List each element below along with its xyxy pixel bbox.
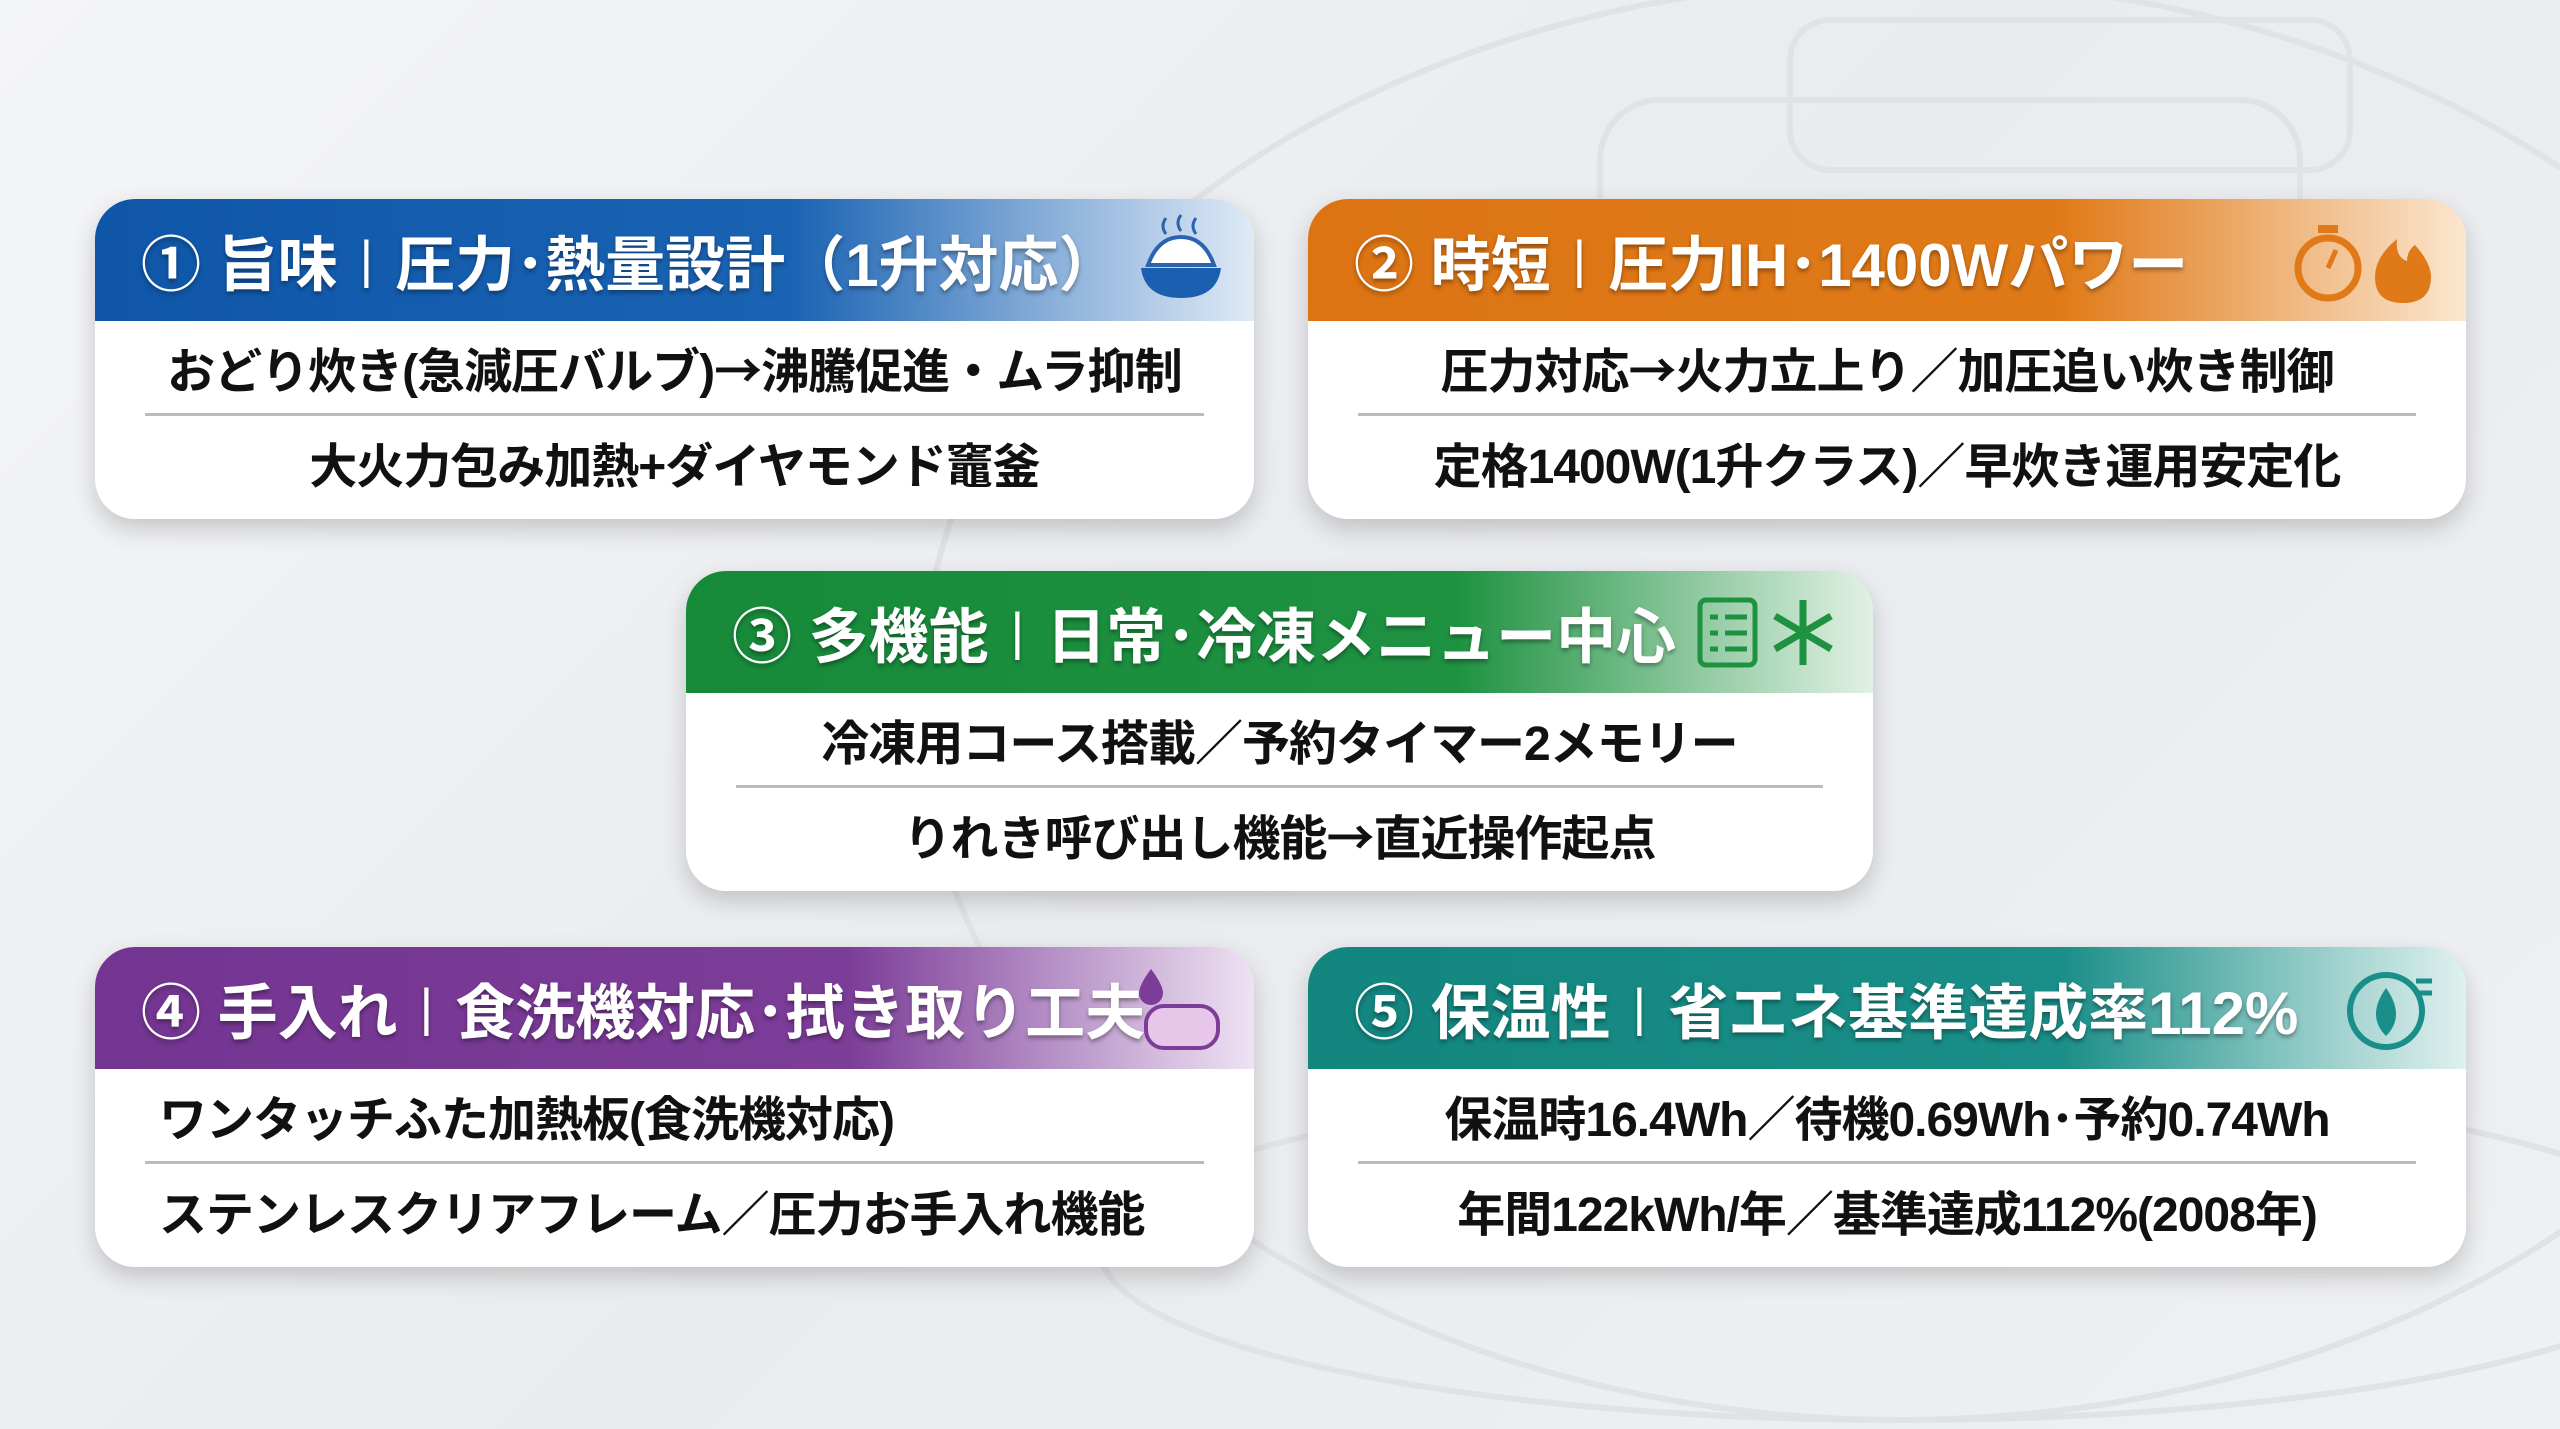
text rows 2: [1358, 332, 2416, 494]
text rows 3: りれき呼び出し機能 直近操作起点: [903, 813, 1656, 866]
text rows 2: 定格1400W(1升クラス)／早炊き運用安定化: [1434, 441, 2340, 494]
heading 3: ･: [1166, 588, 1196, 676]
heading 5: ⑤ 保温性 省エネ基準達成率112%: [1354, 980, 2298, 1046]
text rows 2: →: [1628, 332, 1676, 402]
heading 1: ① 旨味 圧力 熱量設計 1升対応: [141, 232, 1059, 298]
heading 1: [95, 199, 1254, 321]
text rows 5: 年間122kWh/年／基準達成112%(2008年): [1457, 1189, 2317, 1242]
panel: 4 maintenance: [95, 947, 1254, 1267]
icon: checklist and snowflake: [1698, 598, 1833, 668]
heading 1: ）: [1059, 216, 1119, 304]
text rows 1: →: [714, 332, 761, 402]
heading 3: ③ 多機能 日常 冷凍メニュー中心: [732, 604, 1676, 670]
icon: sponge and drop: [1139, 969, 1220, 1050]
heading 1: |: [360, 231, 373, 289]
heading 4: ･: [755, 964, 785, 1052]
text rows 1: 大火力包み加熱+ダイヤモンド竈釜: [309, 441, 1040, 494]
text rows 5: 保温時16.4Wh／待機0.69Wh 予約0.74Wh: [1444, 1094, 2330, 1147]
text rows 3: 冷凍用コース搭載／予約タイマー2メモリー: [821, 718, 1738, 771]
text rows 1: ・: [949, 332, 996, 402]
heading 4: [95, 947, 1254, 1069]
heading 3: [686, 571, 1873, 693]
heading 3: |: [1011, 603, 1024, 661]
text rows 4: ワンタッチふた加熱板(食洗機対応): [159, 1094, 894, 1147]
panel: 5 keep warm: [1308, 947, 2466, 1267]
text rows 3: [736, 718, 1823, 869]
heading 2: ･: [1788, 216, 1818, 304]
icon: timer and flame: [2294, 225, 2431, 303]
text rows 1: おどり炊き(急減圧バルブ) 沸騰促進 ムラ抑制: [167, 346, 1182, 399]
text rows 3: →: [1326, 799, 1374, 869]
icon: rice bowl: [1141, 214, 1221, 298]
text rows 5: ･: [2051, 1080, 2074, 1150]
heading 2: ② 時短 圧力IH 1400Wパワー: [1354, 232, 2188, 298]
panel: 3 multi-function: [686, 571, 1873, 891]
panel: 2 jitan: [1308, 199, 2466, 519]
text rows 1: [145, 332, 1204, 494]
text rows 4: ステンレスクリアフレーム／圧力お手入れ機能: [159, 1189, 1145, 1242]
text rows 5: [1358, 1080, 2416, 1242]
heading 2: [1308, 199, 2466, 321]
heading 4: |: [420, 979, 433, 1037]
heading 1: （: [785, 216, 845, 304]
heading 1: ･: [515, 216, 545, 304]
text rows 2: 圧力対応 火力立上り／加圧追い炊き制御: [1440, 346, 2334, 399]
heading 5: [1308, 947, 2466, 1069]
heading 2: |: [1573, 231, 1586, 289]
heading 5: |: [1633, 979, 1646, 1037]
panel: 1 umami: [95, 199, 1254, 519]
icon: eco plug: [2347, 972, 2432, 1050]
text rows 4: [145, 1094, 1204, 1242]
heading 4: ④ 手入れ 食洗機対応 拭き取り工夫: [141, 980, 1145, 1046]
